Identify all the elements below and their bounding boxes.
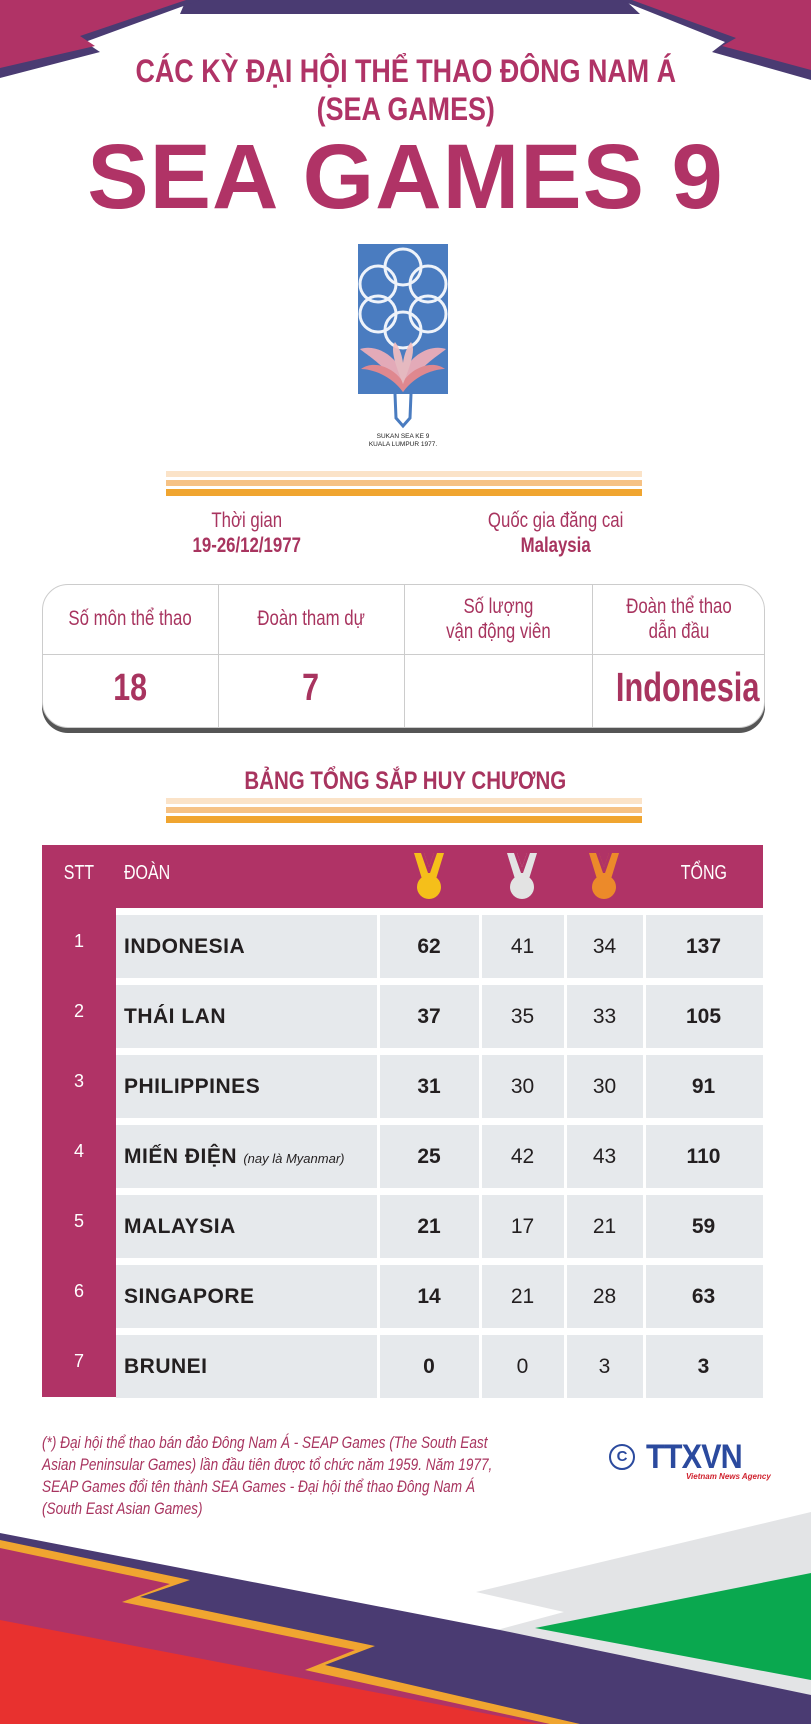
info: host: [488, 509, 624, 557]
row 1: 34: [593, 935, 616, 958]
stat: athletes: vận động viên: [446, 620, 550, 643]
title: supertitle: [135, 53, 676, 127]
row 2: 33: [593, 1005, 616, 1028]
row 1: INDONESIA: [124, 935, 245, 958]
table header: ĐOÀN: [124, 862, 170, 884]
logo: TTXVN: [609, 1438, 772, 1481]
icon: SEA Games 9 logo: SUKAN SEA KE 9: [377, 433, 430, 440]
rank numbers: 6: [74, 1281, 84, 1301]
medal table: [42, 845, 763, 1397]
row 3: 91: [692, 1075, 715, 1098]
stat: athletes: Số lượng: [463, 595, 533, 618]
row 3: 30: [511, 1075, 534, 1098]
top decoration: [0, 0, 811, 80]
stat: delegations: Đoàn tham dự: [257, 607, 365, 630]
table header: STT: [64, 862, 94, 884]
icon: SEA Games 9 logo: KUALA LUMPUR 1977.: [369, 441, 437, 448]
row 4: 42: [511, 1145, 534, 1168]
stat: leader: [626, 595, 731, 643]
row 2: 105: [686, 1005, 721, 1028]
row 1: [116, 915, 763, 978]
row 7: BRUNEI: [124, 1355, 208, 1378]
row 6: 63: [692, 1285, 715, 1308]
stat: sports: Số môn thể thao: [68, 607, 192, 630]
row 4: 110: [687, 1145, 720, 1168]
bottom decoration: [0, 1512, 811, 1724]
row 3: PHILIPPINES: [124, 1075, 260, 1098]
row 5: 59: [692, 1215, 715, 1238]
row 5: [116, 1195, 763, 1258]
row 7: [116, 1335, 763, 1398]
row 2: 37: [417, 1005, 441, 1028]
row 4: MIẾN ĐIỆN (nay là Myanmar): [124, 1145, 344, 1168]
row 1: 137: [686, 935, 721, 958]
logo: TTXVN: C: [617, 1448, 627, 1465]
value: 7: 7: [303, 667, 319, 709]
footnote: (*) Đại hội thể thao bán đảo Đông Nam Á - SEAP Games (The South East Asian Peninsular Games) lần đầu tiên được tổ chức năm 1959. Năm 1977, SEAP Games đổi tên thành SEA Games - Đại hội thể thao Đông Nam Á (South East Asian Games): [42, 1433, 492, 1518]
panel: stats box: [42, 584, 765, 733]
row 3: 30: [593, 1075, 616, 1098]
row 5: 21: [417, 1215, 441, 1238]
rank numbers: 1: [74, 931, 84, 951]
info: time: 19-26/12/1977: [193, 534, 301, 557]
row 5: 21: [593, 1215, 616, 1238]
title: supertitle: (SEA GAMES): [316, 91, 495, 127]
rank numbers: 4: [74, 1141, 84, 1161]
stat: leader: dẫn đầu: [648, 620, 709, 643]
icon: silver medal: [507, 853, 537, 899]
rank numbers: [74, 931, 84, 1371]
decorative stripes 1: [166, 471, 642, 496]
decorative stripes 2: [166, 798, 642, 823]
stat: leader: Đoàn thể thao: [626, 595, 731, 618]
info: host: Quốc gia đăng cai: [488, 509, 624, 532]
rank numbers: 7: [74, 1351, 84, 1371]
row 6: SINGAPORE: [124, 1285, 255, 1308]
info: time: [193, 509, 301, 557]
value: 18: 18: [113, 667, 147, 709]
row 6: [116, 1265, 763, 1328]
row 6: 14: [417, 1285, 441, 1308]
icon: SEA Games 9 logo: [358, 244, 448, 448]
row 6: 28: [593, 1285, 616, 1308]
rank numbers: 5: [74, 1211, 84, 1231]
row 2: THÁI LAN: [124, 1005, 226, 1028]
row 7: 0: [517, 1355, 528, 1378]
row 4: 43: [593, 1145, 616, 1168]
row 4: [116, 1125, 763, 1188]
logo: TTXVN: Vietnam News Agency: [686, 1472, 771, 1481]
title: SEA GAMES 9: SEA GAMES 9: [87, 126, 724, 228]
row 3: [116, 1055, 763, 1118]
row 1: 41: [511, 935, 534, 958]
table header: TỔNG: [681, 862, 727, 884]
row 6: 21: [511, 1285, 534, 1308]
row 7: 3: [599, 1355, 610, 1378]
row 5: 17: [511, 1215, 534, 1238]
row 7: 0: [423, 1355, 435, 1378]
table header: [64, 853, 727, 899]
row 3: 31: [417, 1075, 441, 1098]
row 7: 3: [698, 1355, 709, 1378]
info: host: Malaysia: [521, 534, 591, 557]
value: Indonesia: Indonesia: [616, 664, 759, 710]
row 4: 25: [417, 1145, 441, 1168]
stat: athletes: [446, 595, 550, 643]
icon: gold medal: [414, 853, 444, 899]
row 1: 62: [417, 935, 441, 958]
rank numbers: 3: [74, 1071, 84, 1091]
rank numbers: 2: [74, 1001, 84, 1021]
logo: TTXVN: TTXVN: [646, 1438, 742, 1476]
row 2: [116, 985, 763, 1048]
info: time: Thời gian: [212, 509, 282, 532]
row 2: 35: [511, 1005, 534, 1028]
row 5: MALAYSIA: [124, 1215, 236, 1238]
icon: bronze medal: [589, 853, 619, 899]
title: supertitle: CÁC KỲ ĐẠI HỘI THỂ THAO ĐÔNG NAM Á: [135, 53, 676, 89]
heading: medal table: BẢNG TỔNG SẮP HUY CHƯƠNG: [245, 767, 566, 795]
